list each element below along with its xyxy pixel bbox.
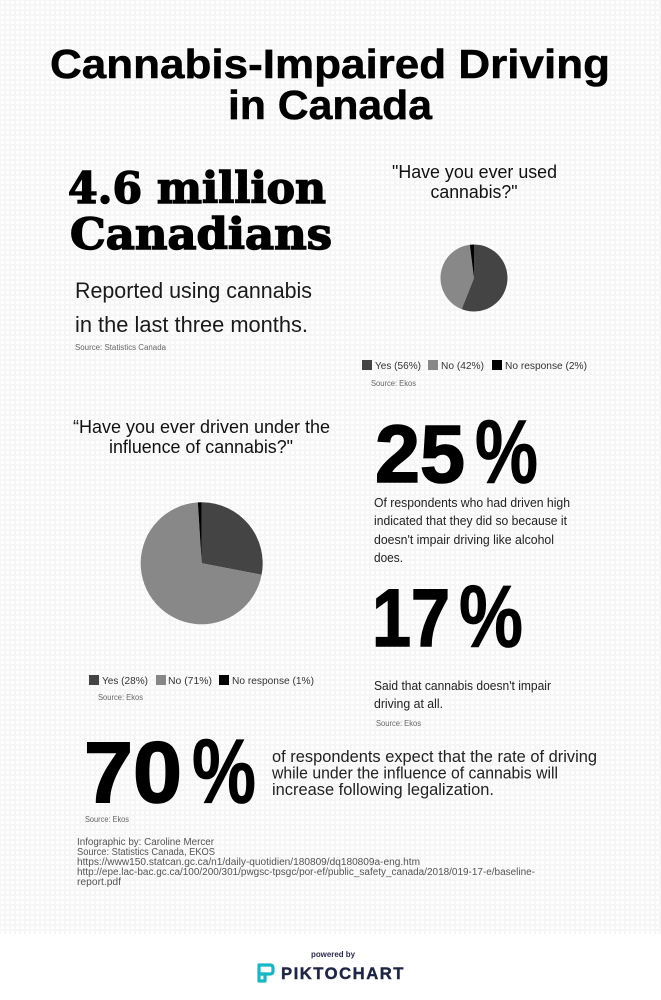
title (50, 41, 610, 128)
source: Source: Ekos (376, 719, 421, 728)
big number: 25 (375, 409, 465, 500)
big number: % (459, 567, 523, 666)
panel: 70 percent stat (84, 721, 597, 824)
panel: 4.6 million Canadians (68, 164, 332, 352)
description: driving at all. (374, 697, 443, 711)
powered by label: powered by (311, 950, 356, 959)
credits and sources: https://www150.statcan.gc.ca/n1/daily-quotidien/180809/dq180809a-eng.htm (77, 857, 420, 868)
description: while under the influence of cannabis will (271, 764, 558, 782)
credits and sources: http://epe.lac-bac.gc.ca/100/200/301/pwgsc-tpsgc/por-ef/public_safety_canada/2018/019-17-e/baseline- (77, 867, 535, 878)
legend (362, 360, 587, 372)
description: increase following legalization. (272, 781, 494, 799)
big number (84, 721, 256, 823)
description: does. (374, 551, 403, 565)
piktochart wordmark: PIKTOCHART (281, 965, 405, 983)
footer: powered by piktochart (259, 950, 405, 983)
description: Reported using cannabis (75, 278, 312, 303)
question heading: “Have you ever driven under the (73, 417, 330, 437)
legend: Yes (28%) (102, 675, 148, 687)
question heading (392, 162, 557, 202)
description: in the last three months. (75, 312, 308, 337)
legend (89, 675, 314, 687)
pie chart (141, 502, 263, 624)
description: indicated that they did so because it (374, 514, 568, 528)
legend: No response (1%) (232, 675, 314, 687)
legend: Yes (56%) (375, 360, 421, 372)
panel: 25 percent stat (374, 403, 570, 565)
panel: have you ever driven under the influence (73, 417, 330, 702)
headline stat: Canadians (70, 210, 332, 260)
credits and sources: Infographic by: Caroline Mercer (77, 837, 215, 848)
big number (375, 403, 538, 503)
title: Cannabis-Impaired Driving (50, 41, 610, 87)
panel: have you ever used cannabis (362, 162, 587, 388)
legend: No response (2%) (505, 360, 587, 372)
big number: % (192, 721, 256, 823)
source: Source: Statistics Canada (75, 343, 167, 352)
pie chart (440, 244, 507, 311)
description: Said that cannabis doesn't impair (374, 679, 551, 693)
description: of respondents expect that the rate of driving (272, 748, 597, 766)
panel: 17 percent stat (372, 567, 551, 728)
description: doesn't impair driving like alcohol (374, 533, 554, 547)
description (374, 679, 551, 711)
icon: piktochart logo (259, 965, 273, 981)
legend: No (71%) (168, 675, 212, 687)
big number: 70 (84, 725, 182, 821)
credits and sources (77, 837, 535, 888)
question heading: influence of cannabis?" (109, 437, 293, 457)
legend: No (42%) (441, 360, 484, 372)
description (75, 278, 312, 337)
description: Of respondents who had driven high (374, 496, 570, 510)
title: in Canada (228, 82, 433, 128)
credits and sources: Source: Statistics Canada, EKOS (77, 847, 216, 858)
question heading: cannabis?" (430, 182, 518, 202)
credits and sources: report.pdf (77, 877, 121, 888)
description (271, 748, 597, 799)
source: Source: Ekos (85, 815, 129, 824)
description (374, 496, 570, 565)
source: Source: Ekos (371, 379, 416, 388)
headline stat (68, 164, 332, 260)
big number: % (475, 403, 538, 503)
big number: 17 (372, 573, 450, 664)
question heading (73, 417, 330, 457)
question heading: "Have you ever used (392, 162, 557, 182)
headline stat: 4.6 million (68, 164, 326, 214)
big number (372, 567, 523, 666)
source: Source: Ekos (98, 693, 143, 702)
